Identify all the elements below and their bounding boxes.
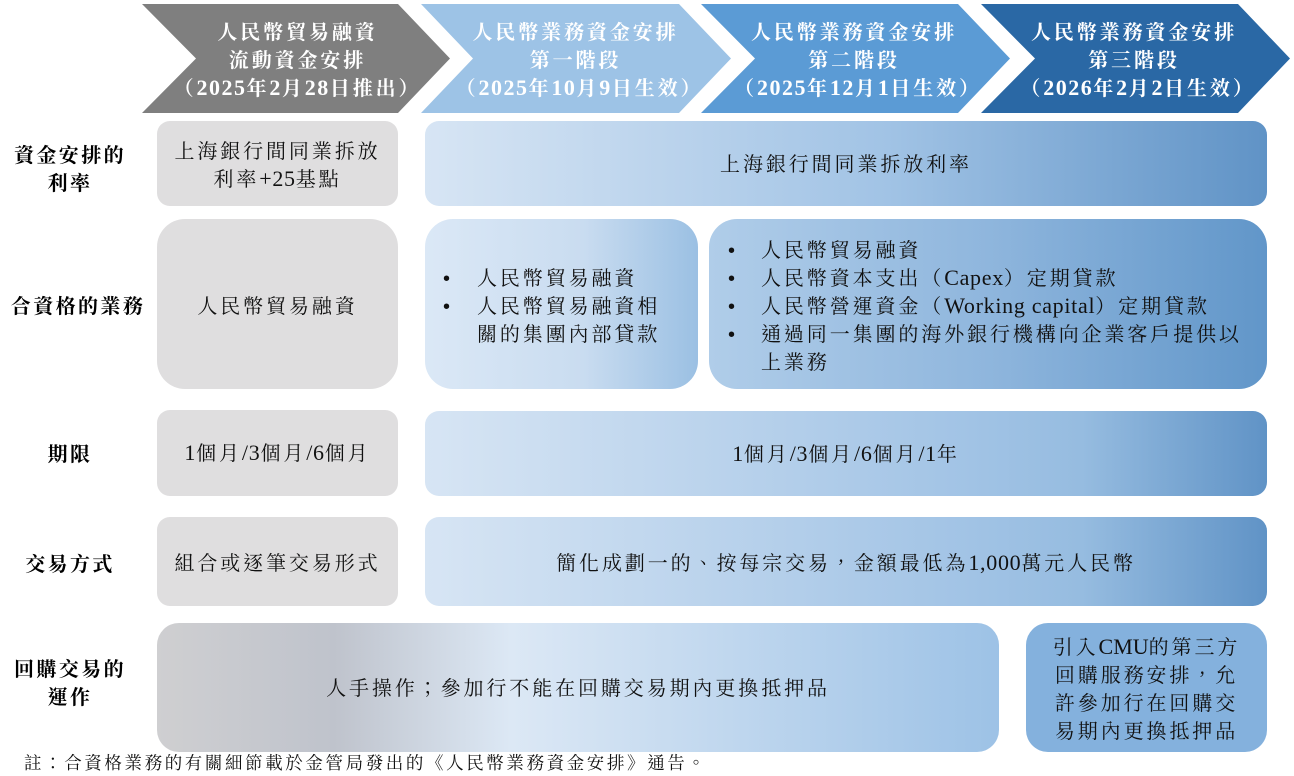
cell: business, phases two and three: • [728,296,735,318]
cell: repo operation, wide: 人手操作；參加行不能在回購交易期內更換抵押品 [326,678,830,700]
row label: tenor: 期限 [48,444,92,466]
row label: transaction mode: 交易方式 [25,554,115,576]
row label: interest rate [14,144,126,195]
cell: business, phase one [425,219,698,389]
cell: rate, gray [157,121,398,206]
cell: rate, gray: 上海銀行間同業拆放 [174,140,381,162]
heading: phase three: 人民幣業務資金安排 [1031,22,1237,44]
heading: trade finance liquidity facility: （2025年2月28日推出） [174,75,421,100]
cell: business, phase one: • [443,296,450,318]
cell: business, gray [157,219,398,389]
chevron: phase one [421,4,731,113]
heading: phase two: 人民幣業務資金安排 [751,22,957,44]
cell: business, phases two and three: • [728,268,735,290]
cell: repo operation, wide [157,623,999,752]
bullet list: 人民幣營運資金（Working capital）定期貸款 [761,293,1210,318]
heading: phase three [1020,22,1256,100]
cell: business, phases two and three [709,219,1267,389]
row label: interest rate: 資金安排的 [14,145,126,167]
cell: business, phases two and three: • [728,324,735,346]
cell: mode, gray [157,517,398,606]
bullet list: 上業務 [761,352,830,374]
bullet list: 人民幣貿易融資 [761,240,921,262]
bullet list: 人民幣資本支出（Capex）定期貸款 [761,265,1118,290]
cell: business, gray: 人民幣貿易融資 [197,296,358,318]
heading: phase two [734,22,982,100]
row label: repo operation: 回購交易的 [14,659,126,681]
cell: repo operation, phase three [1026,623,1267,752]
cell: mode, phases [425,517,1267,606]
heading: trade finance liquidity facility: 人民幣貿易融資 [217,22,378,44]
cell: business, phase one: • [443,268,450,290]
cell: rate, phases: 上海銀行間同業拆放利率 [720,154,972,176]
cell: repo operation, phase three: 引入CMU的第三方 [1053,634,1240,659]
cell: repo operation, phase three: 易期內更換抵押品 [1055,721,1238,743]
chevron: phase three [981,4,1290,113]
bullet list: 關的集團內部貸款 [477,324,660,346]
heading: phase one: （2025年10月9日生效） [456,75,703,100]
heading: phase three: （2026年2月2日生效） [1020,75,1256,100]
bullet list: 通過同一集團的海外銀行機構向企業客戶提供以 [761,324,1242,346]
cell: rate, gray: 利率+25基點 [213,166,342,190]
cell: tenor, phases [425,411,1267,496]
heading: trade finance liquidity facility [174,22,421,100]
heading: phase one: 第一階段 [530,50,621,72]
cell: tenor, gray [157,410,398,496]
cell: business, phases two and three: • [728,240,735,262]
bullet list: 人民幣貿易融資 [477,268,637,290]
row label: repo operation [14,658,126,709]
bullet list [443,268,660,346]
row label: eligible business: 合資格的業務 [11,296,145,318]
heading: phase two: 第二階段 [808,50,900,72]
footnote: 註：合資格業務的有關細節載於金管局發出的《人民幣業務資金安排》通告。 [24,753,707,773]
heading: phase two: （2025年12月1日生效） [734,75,982,100]
cell: tenor, gray: 1個月/3個月/6個月 [184,440,371,465]
heading: trade finance liquidity facility: 流動資金安排 [229,50,366,72]
cell: tenor, phases: 1個月/3個月/6個月/1年 [732,440,960,466]
heading: phase three: 第三階段 [1088,50,1180,72]
cell: rate, phases [425,121,1267,206]
chevron: phase two [701,4,1010,113]
cell: repo operation, phase three: 回購服務安排，允 [1055,665,1238,687]
bullet list: 人民幣貿易融資相 [477,296,660,318]
cell: mode, phases: 簡化成劃一的、按每宗交易，金額最低為1,000萬元人民幣 [556,550,1136,575]
chevron: trade finance liquidity facility [142,4,450,113]
heading: phase one: 人民幣業務資金安排 [472,22,679,44]
cell: mode, gray: 組合或逐筆交易形式 [174,552,381,574]
cell: repo operation, phase three: 許參加行在回購交 [1055,693,1238,715]
bullet list [728,240,1242,374]
row label: interest rate: 利率 [48,173,92,195]
row label: repo operation: 運作 [48,687,92,709]
heading: phase one [456,22,703,100]
